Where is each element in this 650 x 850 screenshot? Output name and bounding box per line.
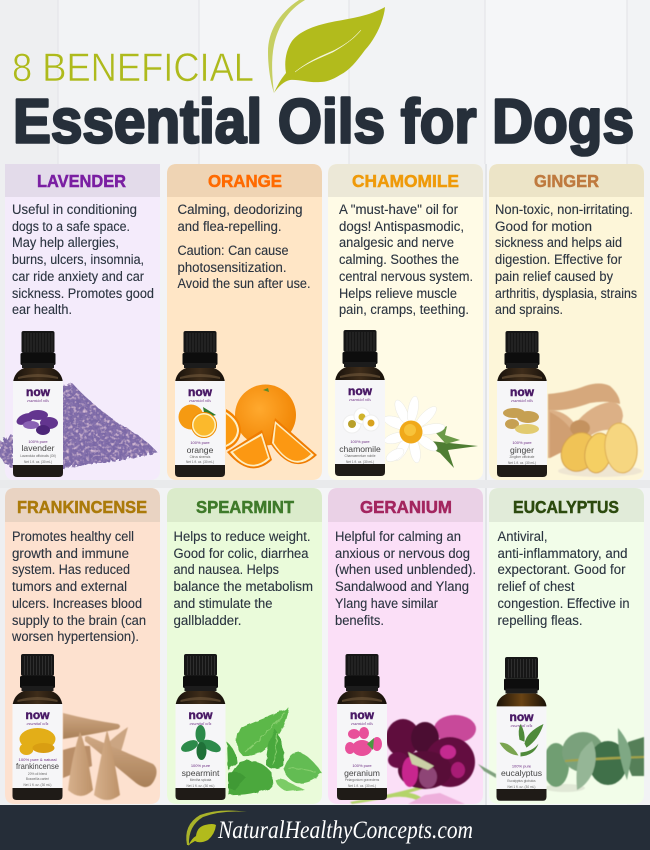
text: orange benefits: Caution: Can cause	[178, 243, 288, 258]
text: eucalyptus benefits: relief of chest	[498, 579, 575, 594]
bottle: chamomile: chamomile	[339, 444, 381, 454]
bottle: lavender: essential oils	[27, 398, 49, 403]
text: geranium benefits: anxious or nervous dog	[335, 546, 470, 561]
bottle: chamomile: Net 1 fl. oz. (30 mL)	[346, 460, 374, 464]
heading: spearmint: SPEARMINT	[196, 497, 294, 517]
text: chamomile benefits: calming. Soothes the	[339, 252, 459, 267]
text: orange benefits	[178, 202, 310, 291]
panel: ginger	[489, 164, 644, 480]
text: lavender benefits: sickness. Promotes good	[12, 286, 154, 301]
text: orange benefits: and flea-repelling.	[178, 219, 282, 234]
bottle: ginger: 100% pure	[512, 440, 532, 445]
text: lavender benefits: burns, ulcers, insomnia,	[12, 252, 144, 267]
text: ginger benefits: Non-toxic, non-irritating.	[495, 202, 633, 217]
bottle: orange: Citrus sinensis	[190, 455, 211, 459]
bottle: frankincense	[12, 654, 62, 800]
bottle: spearmint: 100% pure	[191, 763, 211, 768]
text: frankincense benefits: tumors and external	[12, 579, 127, 594]
bottle: ginger	[497, 331, 547, 477]
text: lavender benefits: May help allergies,	[12, 235, 119, 250]
icon: footer leaf logo	[186, 811, 247, 846]
bottle: eucalyptus: now	[509, 710, 534, 724]
text: frankincense benefits: system. Has reduced	[12, 562, 130, 577]
text: geranium benefits: (when used unblended).	[335, 562, 476, 577]
text: geranium benefits: Ylang have similar	[335, 596, 438, 611]
bottle: geranium: Pelargonium graveolens	[345, 778, 380, 782]
bottle: chamomile	[335, 330, 385, 476]
text: frankincense benefits: Promotes healthy cell	[12, 529, 134, 544]
heading: frankincense: FRANKINCENSE	[17, 497, 147, 517]
image: ginger root and slices	[548, 384, 642, 478]
image: eucalyptus branch	[478, 728, 644, 792]
text: eucalyptus benefits	[498, 529, 630, 628]
heading: geranium: GERANIUM	[360, 497, 452, 517]
text: chamomile benefits	[339, 202, 473, 317]
text: geranium benefits	[335, 529, 476, 628]
text: lavender benefits	[12, 202, 154, 317]
heading: ginger: GINGER	[534, 171, 599, 191]
text: eucalyptus benefits: repelling fleas.	[498, 613, 582, 628]
panel: orange	[167, 164, 322, 480]
bottle: spearmint: now	[188, 708, 213, 722]
bottle: orange	[175, 331, 225, 477]
text: ginger benefits: arthritis, dysplasia, strains	[495, 286, 637, 301]
text: orange benefits: Calming, deodorizing	[178, 202, 302, 217]
image: dried lavender pile	[0, 383, 157, 468]
bottle: geranium: Net 1 fl. oz. (30 mL)	[348, 784, 376, 788]
bottle: lavender: Lavandula officinalis (Oil)	[20, 454, 56, 458]
footer website text: NaturalHealthyConcepts.com	[217, 817, 473, 844]
bottle: orange: now	[188, 385, 213, 399]
bottle: eucalyptus: essential oils	[511, 723, 533, 728]
bottle: ginger: ginger	[510, 445, 534, 455]
image: incense cones	[63, 713, 157, 800]
image: orange fruit and wedges	[226, 384, 317, 468]
bottle: orange: orange	[187, 445, 214, 455]
panel: lavender	[0, 164, 160, 480]
text: ginger benefits: Good for motion	[495, 219, 592, 234]
image: geranium flower	[350, 715, 476, 804]
text: ginger benefits	[495, 202, 637, 317]
bottle: ginger: essential oils	[511, 398, 533, 403]
bottle: spearmint: Net 1 fl. oz. (30 mL)	[186, 784, 214, 788]
bottle: geranium	[337, 654, 387, 800]
panel: chamomile	[328, 164, 483, 480]
bottle: eucalyptus	[496, 657, 546, 801]
text: ginger benefits: digestion. Effective for	[495, 252, 622, 267]
bottle: frankincense: frankincense	[16, 761, 59, 771]
bottle: chamomile: now	[348, 384, 373, 398]
bottle: ginger: Zingiber officinale	[510, 455, 535, 459]
text: frankincense benefits: supply to the brain (can	[12, 613, 146, 628]
text: ginger benefits: sickness and helps aid	[495, 235, 622, 250]
bottle: chamomile: essential oils	[349, 397, 371, 402]
text: lavender benefits: Useful in conditioning	[12, 202, 137, 217]
footer bar	[0, 805, 650, 850]
text: spearmint benefits: gallbladder.	[174, 613, 242, 628]
icon: green leaf	[268, 0, 385, 93]
bottle: lavender: now	[26, 385, 51, 399]
text: geranium benefits: Helpful for calming an	[335, 529, 461, 544]
subtitle: 8 beneficial: 8 BENEFICIAL	[12, 46, 254, 90]
bottle: frankincense: 100% pure & natural	[18, 757, 57, 762]
text: lavender benefits: dogs to a safe space.	[12, 219, 130, 234]
text: spearmint benefits: Helps to reduce weight.	[174, 529, 310, 544]
bottle: geranium: essential oils	[351, 721, 373, 726]
image: chamomile flower and leaves	[382, 395, 478, 468]
panel: geranium	[328, 488, 483, 804]
text: eucalyptus benefits: anti-inflammatory, and	[498, 546, 628, 561]
heading: chamomile: CHAMOMILE	[352, 171, 459, 191]
bottle: eucalyptus: eucalyptus	[501, 768, 542, 778]
text: chamomile benefits: dogs! Antispasmodic,	[339, 219, 464, 234]
bottle: chamomile: Chamaemelum nobile	[344, 454, 376, 458]
text: ginger benefits: pain relief caused by	[495, 269, 613, 284]
heading: eucalyptus: EUCALYPTUS	[513, 497, 619, 517]
bottle: spearmint: Mentha spicata	[190, 778, 212, 782]
text: spearmint benefits: and stimulate the	[174, 596, 272, 611]
bottle: geranium: geranium	[344, 768, 380, 778]
bottle: eucalyptus: 100% pure	[512, 763, 532, 768]
heading: orange: ORANGE	[208, 171, 282, 191]
text: geranium benefits: Sandalwood and Ylang	[335, 579, 469, 594]
text: chamomile benefits: A "must-have" oil for	[339, 202, 458, 217]
bottle: ginger: Net 1 fl. oz. (30 mL)	[508, 461, 536, 465]
bottle: orange: essential oils	[189, 398, 211, 403]
text: orange benefits: Avoid the sun after use.	[178, 276, 310, 291]
bottle: frankincense: Boswellia carteri	[26, 777, 49, 781]
text: spearmint benefits: and nausea. Helps	[174, 562, 279, 577]
heading: lavender: LAVENDER	[37, 171, 126, 191]
title	[12, 46, 634, 156]
bottle: chamomile: 100% pure	[350, 439, 370, 444]
text: lavender benefits: ear health.	[12, 302, 72, 317]
bottle: geranium: 100% pure	[352, 763, 372, 768]
bottle: spearmint: essential oils	[190, 721, 212, 726]
bottle: orange: 100% pure	[190, 440, 210, 445]
bottle: frankincense: essential oils	[27, 721, 49, 726]
bottle: orange: Net 1 fl. oz. (30 mL)	[186, 460, 214, 464]
text: chamomile benefits: Helps relieve muscle	[339, 286, 457, 301]
text: chamomile benefits: pain, cramps, teething.	[339, 302, 469, 317]
bottle: frankincense: Net 1 fl. oz. (30 mL)	[24, 783, 52, 787]
image: mint leaves	[227, 708, 322, 795]
text: eucalyptus benefits: Antiviral,	[498, 529, 548, 544]
panel: frankincense	[5, 488, 160, 804]
text: eucalyptus benefits: expectorant. Good for	[498, 562, 626, 577]
text: lavender benefits: car ride anxiety and car	[12, 269, 144, 284]
text: frankincense benefits: ulcers. Increases blood	[12, 596, 142, 611]
text: ginger benefits: and sprains.	[495, 302, 563, 317]
bottle: frankincense: now	[26, 708, 50, 722]
text: frankincense benefits: growth and immune	[12, 546, 129, 561]
text: spearmint benefits: Good for colic, diarrhea	[174, 546, 309, 561]
text: chamomile benefits: analgesic and nerve	[339, 235, 454, 250]
text: chamomile benefits: central nervous system.	[339, 269, 473, 284]
bottle: eucalyptus: Net 1 fl. oz. (30 mL)	[508, 785, 535, 789]
bottle: lavender	[13, 331, 63, 477]
text: spearmint benefits: balance the metabolism	[174, 579, 313, 594]
text: geranium benefits: benefits.	[335, 613, 384, 628]
panel: eucalyptus	[478, 488, 644, 804]
bottle: eucalyptus: Eucalyptus globulus	[507, 779, 536, 783]
text: eucalyptus benefits: congestion. Effective in	[498, 596, 630, 611]
bottle: geranium: now	[350, 708, 375, 722]
text: frankincense benefits	[11, 529, 146, 644]
bottle: spearmint: spearmint	[182, 768, 220, 778]
bottle: ginger: now	[510, 385, 535, 399]
bottle: lavender: 100% pure	[28, 439, 48, 444]
bottle: lavender: lavender	[22, 443, 55, 453]
bottle: lavender: Net 1 fl. oz. (30 mL)	[24, 460, 52, 464]
panel: spearmint	[167, 488, 322, 804]
text: spearmint benefits	[174, 529, 313, 628]
bottle: spearmint	[176, 654, 226, 800]
text: frankincense benefits: worsen hypertension).	[11, 629, 139, 644]
bottle: frankincense: 20% oil blend	[28, 772, 47, 776]
text: orange benefits: photosensitization.	[178, 260, 286, 275]
